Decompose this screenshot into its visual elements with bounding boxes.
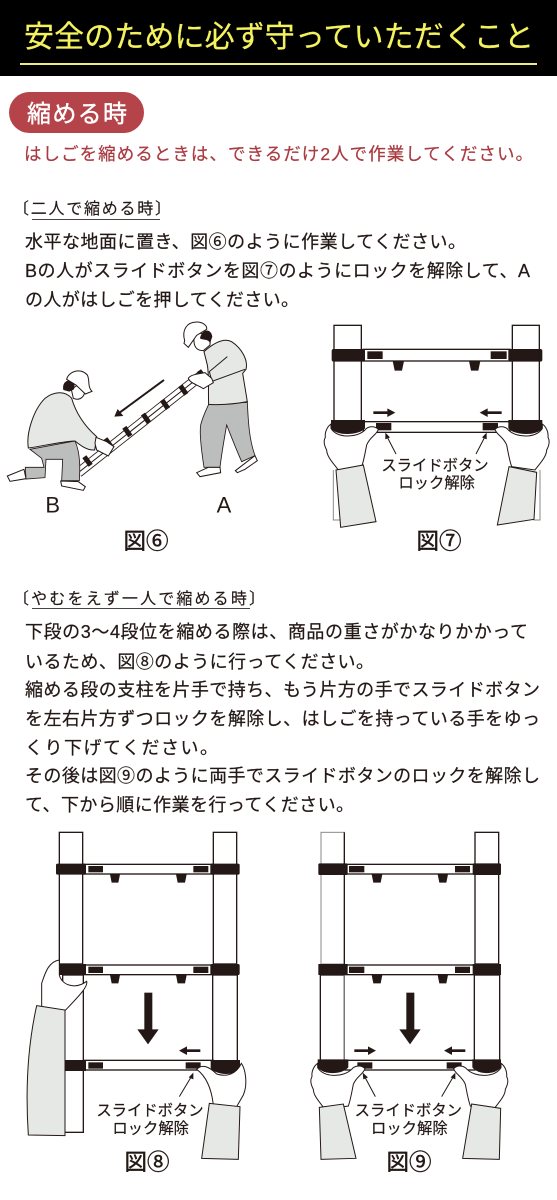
instructions: one person: て、下から順に作業を行ってください。 xyxy=(25,795,354,815)
caption: figure 7: 図⑦ xyxy=(416,529,462,554)
labels A and B: B xyxy=(45,493,60,518)
caption: figure 6: 図⑥ xyxy=(123,529,169,554)
right hand and sleeve xyxy=(197,1063,246,1159)
figure 6: two workers with ladder xyxy=(7,322,257,518)
section badge xyxy=(9,92,144,133)
slide button label: ロック解除 xyxy=(398,475,475,492)
subheading: two people: 〔二人で縮める時〕 xyxy=(13,200,171,218)
instructions: two people: 水平な地面に置き、図⑥のように作業してください。 xyxy=(25,232,466,252)
section badge: 縮める時 xyxy=(27,101,127,128)
ladder frame xyxy=(318,832,501,1073)
instructions: one person: 縮める段の支柱を片手で持ち、もう片方の手でスライドボタン xyxy=(25,680,540,700)
ladder frame xyxy=(56,832,240,1132)
instructions: one person: その後は図⑨のように両手でスライドボタンのロックを解除し xyxy=(25,766,540,786)
title banner xyxy=(0,0,557,76)
slide button label xyxy=(381,458,489,492)
arrow xyxy=(114,380,164,417)
down arrow xyxy=(137,993,159,1044)
instructions: one person: くり下げてください。 xyxy=(25,738,218,758)
hands and sleeves xyxy=(311,1063,508,1159)
red notice: はしごを縮めるときは、できるだけ2人で作業してください。 xyxy=(24,144,533,164)
instructions: one person: 下段の3～4段位を縮める際は、商品の重さがかなりかかって xyxy=(25,622,528,642)
subheading: one person: 〔やむをえず一人で縮める時〕 xyxy=(13,590,265,608)
pointer xyxy=(179,1073,193,1097)
instructions: one person: を左右片方ずつロックを解除し、はしごを持っている手をゆっ xyxy=(25,709,540,729)
instructions: two people xyxy=(25,232,530,310)
down arrow xyxy=(399,993,421,1044)
slide button label xyxy=(355,1103,462,1137)
slide arrows xyxy=(354,1046,465,1055)
slide button label: スライドボタン xyxy=(355,1103,462,1120)
caption: figure 9: 図⑨ xyxy=(386,1150,432,1175)
slide arrows xyxy=(373,408,502,417)
slide button label: スライドボタン xyxy=(381,458,489,475)
labels A and B xyxy=(45,493,232,518)
instructions: two people: Bの人がスライドボタンを図⑦のようにロックを解除して、A xyxy=(25,261,530,281)
pointers xyxy=(363,1073,455,1097)
figure 7: both hands unlock slide buttons xyxy=(324,325,549,527)
pointers xyxy=(385,433,487,454)
worker A xyxy=(184,322,257,477)
hands and sleeves xyxy=(324,424,549,527)
slide button label: ロック解除 xyxy=(112,1120,189,1137)
figure 9: two hands unlock xyxy=(311,832,508,1159)
left hand and sleeve xyxy=(27,960,87,1136)
slide arrow xyxy=(179,1046,200,1055)
ladder xyxy=(78,371,204,473)
figure 8: one hand unlock xyxy=(27,832,246,1159)
instructions: one person: いるため、図⑧のように行ってください。 xyxy=(25,652,374,672)
instructions: one person xyxy=(25,622,540,815)
slide button label: ロック解除 xyxy=(371,1120,448,1137)
ladder frame xyxy=(331,325,542,520)
instructions: two people: の人がはしごを押してください。 xyxy=(25,290,299,310)
title banner: 安全のために必ず守っていただくこと xyxy=(24,21,534,54)
labels A and B: A xyxy=(217,493,232,518)
worker B xyxy=(7,371,114,490)
slide button label xyxy=(96,1103,204,1137)
slide button label: スライドボタン xyxy=(96,1103,204,1120)
caption: figure 8: 図⑧ xyxy=(124,1150,170,1175)
